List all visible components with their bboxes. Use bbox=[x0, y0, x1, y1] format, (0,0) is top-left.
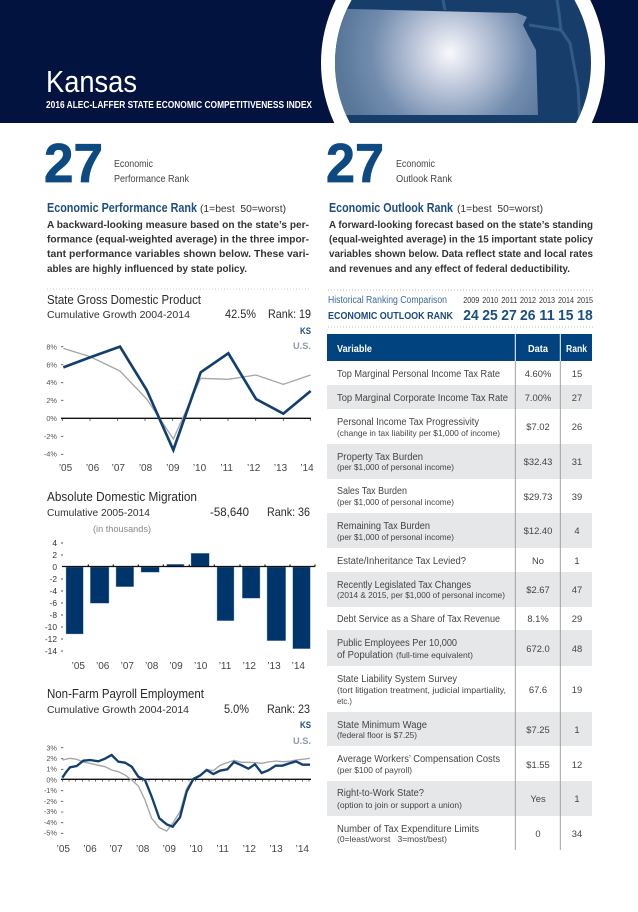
x axis labels: ’05 bbox=[72, 661, 85, 672]
heading bbox=[329, 201, 543, 215]
x axis labels bbox=[57, 844, 309, 855]
y axis labels: 4% bbox=[46, 378, 57, 387]
x axis labels: ’08 bbox=[145, 661, 159, 672]
x axis labels: ’12 bbox=[247, 463, 261, 474]
description text: formance (equal-weighted average) in the three impor- bbox=[47, 234, 309, 246]
row: public employees: (full-time equivalent) bbox=[396, 650, 473, 660]
row: personal income tax rate: 4.60% bbox=[525, 368, 551, 379]
description text: A backward-looking measure based on the state’s per- bbox=[47, 220, 309, 231]
historical ranking comparison: 18 bbox=[577, 308, 593, 324]
y axis labels: -4 bbox=[50, 586, 57, 596]
title: Kansas bbox=[46, 64, 137, 99]
row: legislated changes: Recently Legislated Tax Changes bbox=[337, 580, 471, 591]
row: expenditure limits: Number of Tax Expenditure Limits bbox=[337, 824, 479, 835]
row: liability survey: State Liability System Survey bbox=[337, 674, 457, 685]
y axis labels: -4% bbox=[44, 818, 57, 827]
row: workers compensation: Average Workers’ Compensation Costs bbox=[337, 754, 500, 765]
heading: (1=best 50=worst) bbox=[457, 204, 543, 215]
row: liability survey bbox=[337, 674, 582, 706]
legend: KS bbox=[300, 326, 311, 336]
y axis labels: 0 bbox=[52, 562, 57, 572]
row: property tax: (per $1,000 of personal income) bbox=[337, 462, 454, 472]
row: liability survey: (tort litigation treatment, judicial impartiality, bbox=[337, 685, 506, 695]
row: property tax: $32.43 bbox=[524, 456, 552, 467]
row: debt service: Debt Service as a Share of Tax Revenue bbox=[337, 614, 500, 625]
row: remaining tax: $12.40 bbox=[524, 525, 552, 536]
historical ranking comparison: 2009 bbox=[463, 296, 479, 305]
legend: U.S. bbox=[293, 736, 311, 746]
row: liability survey: 19 bbox=[572, 684, 582, 695]
row: sales tax: 39 bbox=[572, 491, 582, 502]
x axis labels: ’08 bbox=[139, 463, 153, 474]
legend bbox=[293, 720, 311, 746]
rank label: Economic bbox=[114, 159, 153, 170]
row: estate tax: Estate/Inheritance Tax Levied? bbox=[337, 556, 466, 567]
x axis labels bbox=[59, 463, 314, 474]
x axis labels: ’14 bbox=[292, 661, 305, 672]
row: property tax bbox=[337, 452, 582, 472]
row: debt service: 29 bbox=[572, 613, 582, 624]
big rank number: 27 bbox=[326, 132, 384, 194]
chart heading bbox=[47, 293, 311, 321]
row: progressivity: $7.02 bbox=[526, 421, 550, 432]
row: workers compensation bbox=[337, 754, 582, 775]
row: debt service bbox=[337, 613, 582, 625]
row: public employees: 672.0 bbox=[526, 643, 550, 654]
historical ranking comparison: 24 bbox=[463, 308, 480, 324]
row: debt service: 8.1% bbox=[527, 613, 549, 624]
row: sales tax bbox=[337, 486, 582, 507]
subtitle: 2016 ALEC-LAFFER STATE ECONOMIC COMPETITIVENESS INDEX bbox=[46, 100, 312, 111]
row: legislated changes: $2.67 bbox=[526, 584, 550, 595]
description text bbox=[47, 220, 309, 275]
y axis labels: -2% bbox=[44, 432, 57, 441]
historical ranking comparison: 26 bbox=[520, 308, 536, 324]
row: progressivity: (change in tax liability per $1,000 of income) bbox=[337, 428, 500, 438]
row: personal income tax rate: 15 bbox=[572, 368, 582, 379]
row: expenditure limits: 34 bbox=[572, 828, 582, 839]
x axis labels: ’12 bbox=[243, 661, 256, 672]
x axis labels bbox=[72, 661, 305, 672]
x axis labels: ’10 bbox=[193, 463, 207, 474]
row: right to work: 1 bbox=[574, 793, 580, 804]
row: workers compensation: $1.55 bbox=[526, 759, 550, 770]
x axis labels: ’11 bbox=[220, 463, 233, 474]
row: public employees: Public Employees Per 10,000 bbox=[337, 638, 457, 649]
big rank number: 27 bbox=[44, 132, 103, 194]
panel: gross domestic product chart bbox=[44, 293, 314, 474]
row: expenditure limits: 0 bbox=[535, 828, 541, 839]
unit note: (in thousands) bbox=[93, 524, 151, 534]
x axis labels: ’07 bbox=[121, 661, 134, 672]
x axis labels: ’13 bbox=[269, 844, 283, 855]
chart heading: Cumulative Growth 2004-2014 bbox=[47, 310, 190, 321]
x axis labels: ’11 bbox=[216, 844, 229, 855]
y axis labels: 1% bbox=[46, 764, 57, 774]
rank label bbox=[396, 159, 453, 185]
y axis labels bbox=[44, 744, 57, 838]
historical ranking comparison: 2011 bbox=[501, 296, 517, 305]
row: remaining tax: Remaining Tax Burden bbox=[337, 521, 430, 532]
row: public employees: 48 bbox=[572, 643, 582, 654]
heading: Economic Performance Rank bbox=[47, 201, 198, 215]
row: corporate income tax rate: 7.00% bbox=[525, 392, 551, 403]
y axis labels: -4% bbox=[44, 450, 57, 458]
chart heading: Rank: 36 bbox=[267, 505, 310, 519]
bar chart bbox=[61, 543, 315, 651]
historical ranking comparison: 27 bbox=[501, 308, 517, 324]
chart heading: Absolute Domestic Migration bbox=[47, 490, 197, 504]
row: minimum wage bbox=[337, 720, 580, 740]
row: corporate income tax rate: Top Marginal Corporate Income Tax Rate bbox=[337, 393, 508, 404]
row: right to work bbox=[337, 788, 580, 810]
y axis labels: -2 bbox=[50, 574, 57, 584]
historical ranking comparison: 15 bbox=[558, 308, 574, 324]
chart heading: 5.0% bbox=[224, 702, 249, 716]
x axis labels: ’05 bbox=[59, 463, 73, 474]
row: legislated changes: (2014 & 2015, per $1,000 of personal income) bbox=[337, 590, 505, 600]
row: liability survey: 67.6 bbox=[529, 684, 547, 695]
heading: Economic Outlook Rank bbox=[329, 201, 454, 215]
x axis labels: ’13 bbox=[274, 463, 288, 474]
y axis labels: 8% bbox=[46, 342, 57, 352]
x axis labels: ’10 bbox=[189, 844, 203, 855]
x axis labels: ’10 bbox=[194, 661, 208, 672]
row: remaining tax: 4 bbox=[574, 525, 580, 536]
chart heading: Cumulative Growth 2004-2014 bbox=[47, 705, 189, 716]
chart heading: Non-Farm Payroll Employment bbox=[47, 687, 204, 701]
row: right to work: Right-to-Work State? bbox=[337, 788, 424, 799]
historical ranking comparison: 2015 bbox=[577, 296, 594, 305]
icon: Kansas map in circle bbox=[321, 0, 605, 123]
y axis labels: 6% bbox=[46, 360, 57, 370]
line chart bbox=[61, 347, 311, 454]
rank label: Outlook Rank bbox=[396, 174, 453, 185]
y axis labels: 2% bbox=[46, 754, 57, 763]
row: corporate income tax rate: 27 bbox=[572, 392, 582, 403]
historical ranking comparison: ECONOMIC OUTLOOK RANK bbox=[328, 310, 453, 322]
row: public employees bbox=[337, 638, 582, 661]
historical ranking comparison: 25 bbox=[482, 308, 498, 324]
table header: Variable bbox=[337, 344, 372, 355]
chart heading: Cumulative 2005-2014 bbox=[47, 508, 150, 519]
description text: (equal-weighted average) in the 15 important state policy bbox=[329, 234, 593, 246]
x axis labels: ’09 bbox=[169, 661, 183, 672]
chart heading: Rank: 19 bbox=[268, 307, 311, 321]
x axis labels: ’07 bbox=[112, 463, 125, 474]
row: remaining tax bbox=[337, 521, 580, 542]
y axis labels: 3% bbox=[46, 744, 57, 752]
row: liability survey: etc.) bbox=[337, 696, 352, 706]
description text: A forward-looking forecast based on the state’s standing bbox=[329, 220, 593, 231]
x axis labels: ’06 bbox=[96, 661, 110, 672]
panel: economic outlook summary bbox=[326, 132, 593, 275]
historical ranking comparison: 2012 bbox=[520, 296, 536, 305]
x axis labels: ’05 bbox=[57, 844, 70, 855]
row: workers compensation: (per $100 of payroll) bbox=[337, 765, 412, 775]
row: estate tax: 1 bbox=[574, 555, 580, 566]
historical ranking comparison: 2013 bbox=[539, 296, 555, 305]
row: progressivity: 26 bbox=[572, 421, 582, 432]
y axis labels: -3% bbox=[44, 807, 57, 816]
row: progressivity: Personal Income Tax Progressivity bbox=[337, 417, 479, 428]
y axis labels: 0% bbox=[46, 776, 57, 784]
header banner bbox=[0, 0, 638, 123]
row: estate tax bbox=[337, 555, 580, 567]
rank label: Performance Rank bbox=[114, 174, 190, 185]
chart heading bbox=[47, 687, 310, 716]
x axis labels: ’13 bbox=[267, 661, 281, 672]
row: minimum wage: State Minimum Wage bbox=[337, 720, 427, 731]
x axis labels: ’14 bbox=[296, 844, 309, 855]
description text: and revenues and any effect of federal deductibility. bbox=[329, 264, 570, 275]
chart heading: Rank: 23 bbox=[267, 702, 310, 716]
y axis labels bbox=[45, 538, 57, 656]
row: remaining tax: (per $1,000 of personal income) bbox=[337, 532, 454, 542]
rank label: Economic bbox=[396, 159, 435, 170]
y axis labels: -6 bbox=[50, 598, 57, 608]
y axis labels: -8 bbox=[50, 610, 57, 620]
row: estate tax: No bbox=[532, 555, 544, 566]
y axis labels: -12 bbox=[45, 634, 57, 644]
historical ranking comparison: 11 bbox=[539, 308, 555, 324]
chart heading bbox=[47, 490, 310, 519]
x axis labels: ’06 bbox=[86, 463, 100, 474]
row: property tax: Property Tax Burden bbox=[337, 452, 423, 463]
table header: Rank bbox=[566, 344, 587, 355]
x axis labels: ’08 bbox=[136, 844, 150, 855]
y axis labels: -2% bbox=[44, 797, 57, 806]
historical ranking comparison: 2014 bbox=[558, 296, 575, 305]
y axis labels: 4 bbox=[52, 538, 57, 548]
row: progressivity bbox=[337, 417, 582, 438]
row: sales tax: $29.73 bbox=[524, 491, 552, 502]
row: legislated changes bbox=[337, 580, 582, 600]
description text: tant performance variables shown below. These vari- bbox=[47, 249, 309, 260]
row: property tax: 31 bbox=[572, 456, 582, 467]
chart heading: 42.5% bbox=[225, 307, 256, 321]
x axis labels: ’09 bbox=[166, 463, 180, 474]
x axis labels: ’14 bbox=[300, 463, 314, 474]
chart heading: -58,640 bbox=[210, 505, 249, 519]
row: expenditure limits: (0=least/worst 3=most/best) bbox=[337, 834, 447, 844]
row: legislated changes: 47 bbox=[572, 584, 582, 595]
description text: variables shown below. Data reflect state and local rates bbox=[329, 249, 593, 260]
row: public employees: of Population bbox=[337, 650, 393, 661]
heading: (1=best 50=worst) bbox=[200, 204, 286, 215]
legend: U.S. bbox=[293, 341, 311, 351]
y axis labels: -5% bbox=[44, 828, 57, 838]
table header: Data bbox=[528, 344, 548, 355]
variables table bbox=[327, 334, 592, 850]
description text bbox=[329, 220, 593, 275]
row: sales tax: Sales Tax Burden bbox=[337, 486, 407, 497]
description text: ables are highly influenced by state policy. bbox=[47, 264, 247, 275]
chart heading: State Gross Domestic Product bbox=[47, 293, 201, 307]
row: expenditure limits bbox=[337, 824, 582, 844]
row: personal income tax rate: Top Marginal Personal Income Tax Rate bbox=[337, 369, 500, 380]
row: right to work: Yes bbox=[530, 793, 546, 804]
row: corporate income tax rate bbox=[337, 392, 582, 404]
table header bbox=[327, 334, 592, 361]
line chart bbox=[61, 748, 311, 833]
y axis labels: 2 bbox=[52, 550, 57, 560]
historical ranking comparison: 2010 bbox=[482, 296, 499, 305]
x axis labels: ’07 bbox=[109, 844, 123, 855]
historical ranking comparison: Historical Ranking Comparison bbox=[328, 295, 447, 306]
row: personal income tax rate bbox=[337, 368, 582, 380]
legend: KS bbox=[300, 720, 311, 730]
row: minimum wage: (federal floor is $7.25) bbox=[337, 730, 417, 740]
rank label bbox=[114, 159, 190, 185]
row: minimum wage: $7.25 bbox=[526, 724, 550, 735]
row: right to work: (option to join or support a union) bbox=[337, 800, 462, 810]
row: workers compensation: 12 bbox=[572, 759, 582, 770]
row: sales tax: (per $1,000 of personal income) bbox=[337, 497, 454, 507]
panel: economic performance summary bbox=[44, 132, 309, 275]
x axis labels: ’09 bbox=[163, 844, 176, 855]
row: minimum wage: 1 bbox=[574, 724, 580, 735]
panel: payroll employment chart bbox=[44, 687, 311, 855]
x axis labels: ’11 bbox=[219, 661, 232, 672]
y axis labels: -1% bbox=[44, 786, 57, 795]
panel: domestic migration chart bbox=[45, 490, 315, 672]
y axis labels bbox=[44, 342, 57, 458]
historical ranking comparison bbox=[328, 295, 594, 324]
legend bbox=[293, 326, 311, 351]
x axis labels: ’06 bbox=[83, 844, 97, 855]
y axis labels: 2% bbox=[46, 396, 57, 405]
y axis labels: 0% bbox=[46, 414, 57, 423]
y axis labels: -10 bbox=[45, 622, 57, 632]
y axis labels: -14 bbox=[45, 646, 57, 656]
x axis labels: ’12 bbox=[243, 844, 256, 855]
table row stripes bbox=[327, 385, 592, 816]
